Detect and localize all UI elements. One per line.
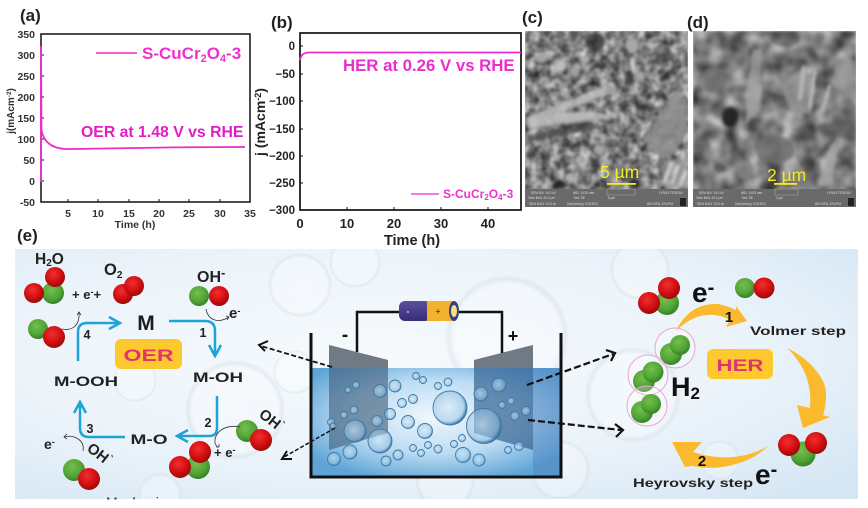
x axis tick labels	[65, 208, 256, 220]
x axis tick labels: 40	[481, 216, 495, 231]
legend: 4	[220, 53, 227, 65]
SEM info bar: 5 µm	[608, 196, 615, 200]
step numbers: 1	[200, 326, 207, 340]
y axis title: -2	[6, 91, 13, 97]
OH- label bottom: OH	[84, 440, 112, 467]
panel (c): SEM image 5 um	[522, 8, 688, 207]
x axis tick labels: 20	[387, 216, 401, 231]
SEM info bar	[525, 189, 688, 207]
panel (b): HER stability chart	[252, 13, 521, 249]
x axis tick labels: 20	[153, 208, 165, 220]
SEM info bar: BIO HEN, KFUPM	[815, 202, 841, 206]
legend: S-CuCr	[443, 187, 484, 201]
legend: -3	[226, 44, 241, 63]
legend	[411, 187, 514, 202]
molecule: H2O bottom	[778, 432, 827, 466]
OER badge: OER	[124, 346, 174, 365]
HER cycle	[627, 277, 846, 490]
molecule: OH right	[236, 420, 272, 451]
step numbers: 2	[205, 416, 212, 430]
battery: -	[407, 307, 410, 316]
dashed arrow to HER bottom	[528, 420, 623, 437]
wires	[357, 312, 502, 353]
Heyrovsky step label: Heyrovsky step	[633, 478, 753, 490]
molecule: O2	[113, 276, 144, 304]
HER current curve	[300, 52, 521, 60]
molecule: OH top	[189, 286, 229, 306]
label (a): (a)	[20, 6, 41, 25]
electrolyte water	[311, 368, 561, 476]
molecule: H2O lower	[169, 441, 211, 479]
label (b): (b)	[271, 13, 293, 32]
H2 molecule 3	[627, 386, 667, 426]
y axis tick labels: 300	[17, 50, 35, 62]
OH- label top: OH	[197, 269, 221, 286]
molecule: OH bottom	[63, 459, 100, 490]
y axis tick labels: 50	[23, 155, 35, 167]
SEM info bar: Date(m/d/y): 02/15/24	[567, 202, 598, 206]
white strip below clipped caption	[0, 500, 868, 508]
SEM info bar: SEM MV: 10.0 kV	[531, 191, 557, 195]
y axis title: )	[6, 88, 17, 91]
SEM info bar: 2 µm	[776, 196, 783, 200]
thin electron arrows	[62, 309, 240, 451]
cathode electrode	[329, 345, 388, 450]
molecule: OH top	[735, 278, 774, 298]
H2 molecule 2	[628, 355, 668, 395]
y axis tick labels: −250	[269, 178, 295, 190]
y axis title: j(mAcm	[6, 97, 17, 134]
y axis tick labels: 350	[17, 29, 35, 41]
label (d): (d)	[687, 13, 709, 32]
y axis tick labels: −150	[269, 124, 295, 136]
right side water tint	[533, 368, 561, 476]
SEM info bar: LYRA3 TESCAN	[659, 191, 683, 195]
HER badge: HER	[716, 356, 764, 375]
y axis tick labels: −100	[269, 96, 295, 108]
x axis tick labels: 15	[123, 208, 135, 220]
SEM info bar: SEM MAG: 10.0 kx	[529, 202, 557, 206]
SEM info bar: Det: SE	[742, 196, 753, 200]
OER current curve	[41, 46, 245, 182]
plus sign: +	[508, 326, 518, 346]
OH- label right: `	[276, 420, 287, 432]
y axis tick labels: 200	[17, 92, 35, 104]
number 1: 1	[725, 309, 733, 326]
HER badge	[707, 349, 773, 379]
molecule: H2O top	[638, 277, 680, 315]
y axis tick labels: −300	[269, 205, 295, 217]
SEM info bar: WD: 14.20 mm	[573, 191, 595, 195]
OER badge	[115, 339, 182, 369]
step numbers: 4	[84, 328, 91, 342]
beaker walls	[311, 333, 561, 477]
dashed arrow to OER bottom	[282, 428, 335, 459]
battery: +	[436, 307, 441, 316]
label (e): (e)	[17, 226, 38, 245]
y axis title: -2	[253, 93, 263, 101]
SEM info bar: LYRA3 TESCAN	[827, 191, 851, 195]
x axis tick labels: 10	[340, 216, 354, 231]
Volmer step label: Volmer step	[750, 326, 846, 338]
OH- label top: -	[221, 265, 225, 280]
H2O label: H	[35, 251, 46, 268]
H2O label: O	[52, 251, 64, 268]
y axis tick labels: −50	[275, 69, 295, 81]
x axis tick labels: 35	[244, 208, 256, 220]
O2 label: O	[104, 261, 117, 279]
arrow 4	[78, 317, 120, 361]
M-O label: M-O	[130, 432, 168, 447]
M label: M	[137, 312, 155, 335]
y axis tick labels: 0	[289, 41, 295, 53]
legend	[96, 44, 241, 65]
H2 label: 2	[690, 384, 700, 403]
x axis tick labels: 25	[183, 208, 195, 220]
scale bar	[600, 166, 638, 185]
x axis tick labels	[296, 216, 495, 231]
y axis tick labels: 100	[17, 134, 35, 146]
SEM info bar: SEM MAG: 20.0 kx	[697, 202, 725, 206]
electron label top: e	[692, 277, 708, 308]
x axis tick labels: 10	[92, 208, 104, 220]
electron label left: e	[44, 436, 52, 452]
legend: -3	[503, 187, 514, 201]
electron label bottom: -	[771, 459, 777, 481]
plot frame	[300, 33, 521, 210]
y axis tick labels: −200	[269, 151, 295, 163]
electron label left: -	[52, 437, 55, 447]
y axis tick labels: 150	[17, 113, 35, 125]
legend: S-CuCr	[142, 44, 201, 63]
molecule: H2O top	[24, 267, 65, 304]
y axis title: )	[252, 88, 268, 93]
step numbers	[84, 326, 212, 436]
micrograph texture	[693, 31, 856, 207]
x axis tick labels: 5	[65, 208, 71, 220]
panel (a): OER stability chart	[6, 6, 256, 231]
label (c): (c)	[522, 8, 543, 27]
annotation: HER at 0.26 V vs RHE	[343, 56, 515, 75]
arrow 1	[676, 304, 747, 331]
OER cycle	[24, 251, 287, 490]
arrow 3	[74, 402, 125, 437]
panel (e): water splitting schematic	[15, 236, 858, 508]
arrow 1	[169, 321, 221, 356]
arrow 2	[787, 348, 830, 428]
legend: 2	[201, 53, 207, 65]
scale bar: 5 µm	[600, 162, 639, 182]
M-OOH label: M-OOH	[54, 374, 118, 389]
H2O label: 2	[46, 258, 52, 269]
O2 label: 2	[117, 270, 123, 281]
plus electron text: +	[93, 287, 101, 302]
x axis title: Time (h)	[384, 233, 440, 249]
electron label lower: -	[232, 445, 235, 455]
legend: O	[207, 44, 220, 63]
panel (d): SEM image 2 um	[687, 13, 856, 207]
dashed arrow to OER top	[259, 341, 332, 367]
OH- label right: OH	[256, 406, 284, 433]
OH- label bottom: `	[104, 454, 115, 466]
dashed arrow to HER top	[527, 350, 615, 385]
x axis title: Time (h)	[115, 219, 155, 231]
y axis tick labels: 250	[17, 71, 35, 83]
electron label bottom: e	[755, 459, 771, 490]
electron label right top: -	[237, 306, 240, 316]
annotation: OER at 1.48 V vs RHE	[81, 124, 243, 141]
arrow 2	[177, 396, 217, 442]
legend: O	[489, 187, 498, 201]
molecule: OH left	[28, 319, 65, 348]
H2 label: H	[671, 372, 690, 402]
SEM info bar	[693, 189, 856, 207]
y axis tick labels: -50	[20, 197, 35, 209]
SEM info bar: WD: 14.03 mm	[741, 191, 763, 195]
x axis tick labels: 30	[214, 208, 226, 220]
SEM info bar: BIO HEN, KFUPM	[647, 202, 673, 206]
y axis tick labels: 0	[29, 176, 35, 188]
bubbles	[328, 372, 530, 466]
electron label top: -	[708, 277, 714, 299]
x axis tick labels: 30	[434, 216, 448, 231]
scale bar: 2 µm	[767, 165, 806, 185]
legend: 4	[498, 193, 503, 202]
plus electron text: -	[90, 287, 93, 297]
SEM info bar: Det: SE	[574, 196, 585, 200]
battery	[399, 301, 459, 321]
step numbers: 3	[87, 422, 94, 436]
electron label right top: e	[229, 305, 237, 322]
number 2: 2	[698, 453, 706, 470]
plus electron text: + e	[72, 287, 90, 302]
electron label lower: + e	[214, 445, 232, 460]
arrow 3	[672, 442, 768, 468]
plot frame	[41, 34, 250, 202]
electrolysis cell	[311, 301, 561, 477]
SEM info bar: View field: 10.4 µm	[696, 196, 723, 200]
x axis tick labels: 0	[296, 216, 304, 231]
SEM info bar: Date(m/d/y): 02/15/24	[735, 202, 766, 206]
H2 molecule 1	[655, 328, 695, 368]
minus sign: -	[342, 325, 348, 346]
M-OH label: M-OH	[193, 370, 243, 385]
SEM info bar: SEM MV: 10.0 kV	[699, 191, 725, 195]
y axis tick labels	[269, 41, 295, 217]
background with faint bubbles	[15, 236, 858, 508]
anode electrode	[474, 345, 533, 450]
SEM info bar: View field: 20.0 µm	[528, 196, 555, 200]
legend: 2	[484, 193, 489, 202]
y axis title: j (mAcm	[252, 101, 268, 156]
micrograph texture	[525, 31, 688, 207]
y axis tick labels	[17, 29, 35, 209]
